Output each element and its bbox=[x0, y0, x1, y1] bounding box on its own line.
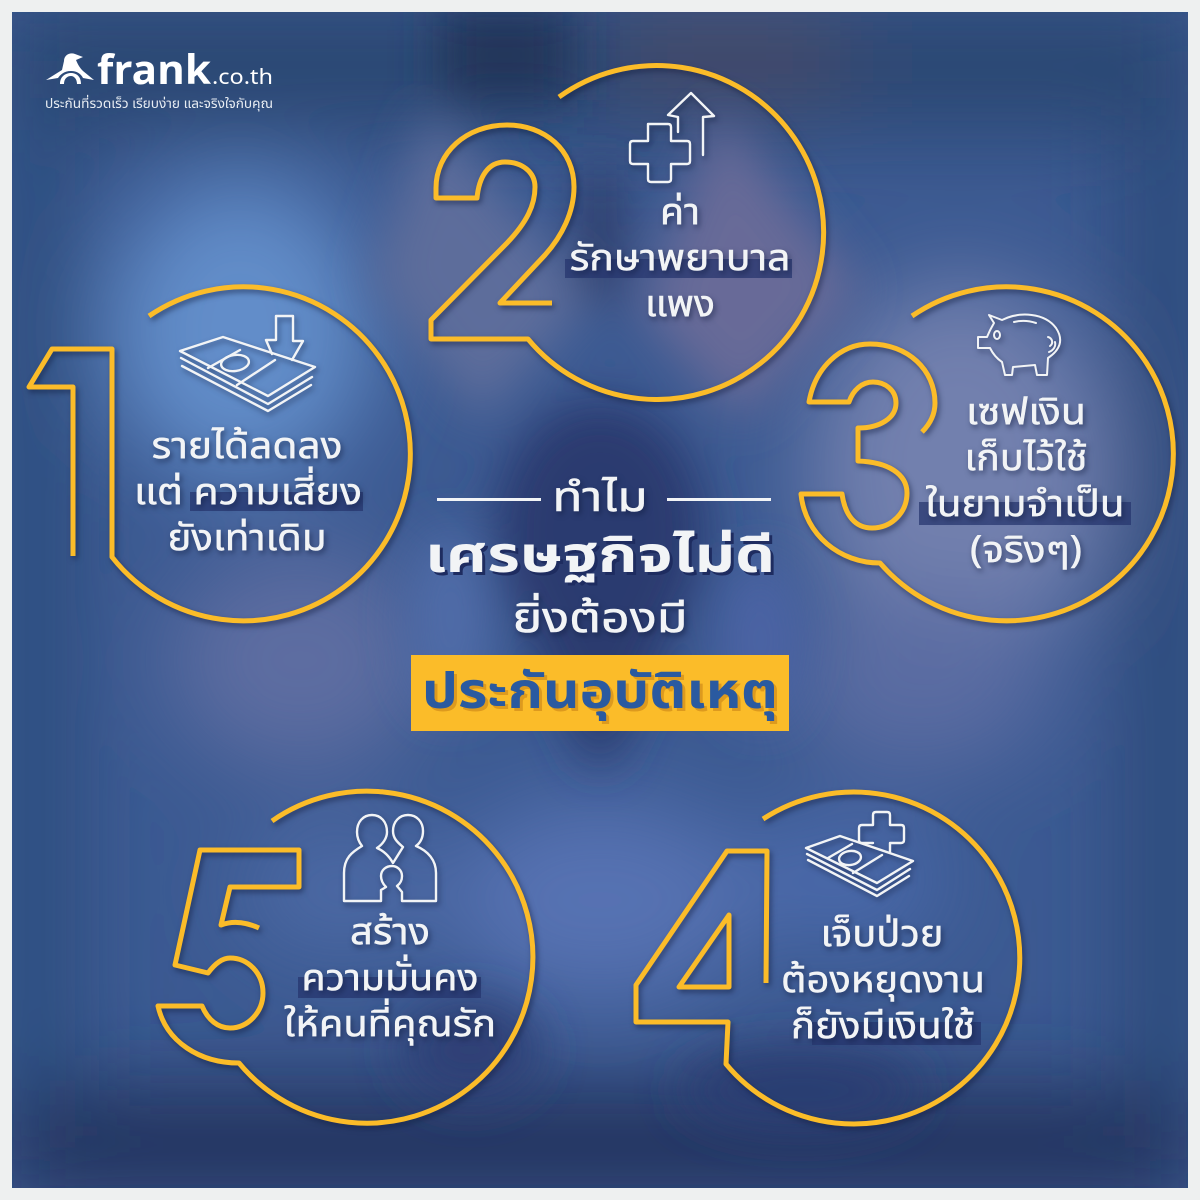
text bbox=[134, 419, 362, 567]
wordmark suffix: .co.th bbox=[212, 63, 273, 94]
banner text: ประกันอุบัติเหตุ bbox=[422, 655, 778, 731]
panel 1: income down bbox=[29, 287, 410, 621]
text bbox=[570, 185, 790, 333]
text: แต่ ความเสี่ยง bbox=[134, 465, 362, 521]
title line 2: เศรษฐกิจไม่ดี bbox=[425, 519, 775, 595]
title line 3: ยิ่งต้องมี bbox=[512, 589, 688, 651]
numeral 5 and ring bbox=[158, 791, 533, 1123]
text bbox=[926, 385, 1124, 579]
text: รักษาพยาบาล bbox=[570, 231, 790, 287]
text: เก็บไว้ใช้ bbox=[964, 431, 1088, 487]
divider left bbox=[437, 498, 541, 501]
highlight bar bbox=[190, 492, 363, 511]
text: เซฟเงิน bbox=[966, 385, 1086, 441]
text: แพง bbox=[645, 277, 715, 333]
numeral 4 and ring bbox=[636, 792, 1020, 1124]
text: เจ็บป่วย bbox=[820, 907, 944, 963]
numeral 1 and ring bbox=[29, 287, 410, 621]
icon: money down bbox=[180, 316, 315, 411]
text: ในยามจำเป็น bbox=[926, 477, 1124, 533]
highlight bar bbox=[565, 259, 792, 278]
text bbox=[284, 905, 496, 1053]
panel 3: save money bbox=[801, 287, 1173, 621]
logo: frank.co.th bbox=[45, 42, 273, 114]
text: ก็ยังมีเงินใช้ bbox=[791, 999, 975, 1055]
text: ยังเท่าเดิม bbox=[168, 511, 326, 567]
numeral 4 inner triangle bbox=[679, 915, 729, 987]
highlight bar bbox=[812, 1022, 981, 1045]
text: ต้องหยุดงาน bbox=[781, 953, 985, 1009]
numeral 2 and ring bbox=[431, 65, 824, 399]
highlight bar bbox=[919, 502, 1131, 525]
numeral 3 and ring bbox=[801, 287, 1173, 621]
icon: penguin bbox=[46, 53, 94, 84]
central title bbox=[411, 468, 789, 731]
icon: family bbox=[344, 815, 436, 901]
panel 2: medical cost bbox=[431, 65, 824, 399]
text: (จริงๆ) bbox=[970, 523, 1082, 579]
text: ให้คนที่คุณรัก bbox=[284, 997, 496, 1053]
tagline: ประกันที่รวดเร็ว เรียบง่าย และจริงใจกับคุณ bbox=[45, 94, 273, 114]
icon: cross with arrow up bbox=[630, 93, 714, 182]
text: สร้าง bbox=[350, 905, 430, 961]
title line 1: ทำไม bbox=[552, 468, 648, 530]
yellow banner bbox=[411, 655, 789, 731]
divider right bbox=[667, 498, 771, 501]
panel 4: sick leave bbox=[636, 792, 1020, 1124]
text: ความมั่นคง bbox=[302, 951, 478, 1007]
panel 5: security for loved ones bbox=[158, 791, 533, 1123]
text: ค่า bbox=[660, 185, 700, 241]
wordmark: frank bbox=[97, 42, 211, 102]
text bbox=[781, 907, 985, 1055]
highlight bar bbox=[298, 977, 481, 998]
icon: money with cross bbox=[806, 812, 913, 896]
text: รายได้ลดลง bbox=[152, 419, 342, 475]
icon: piggy bank bbox=[978, 315, 1060, 375]
